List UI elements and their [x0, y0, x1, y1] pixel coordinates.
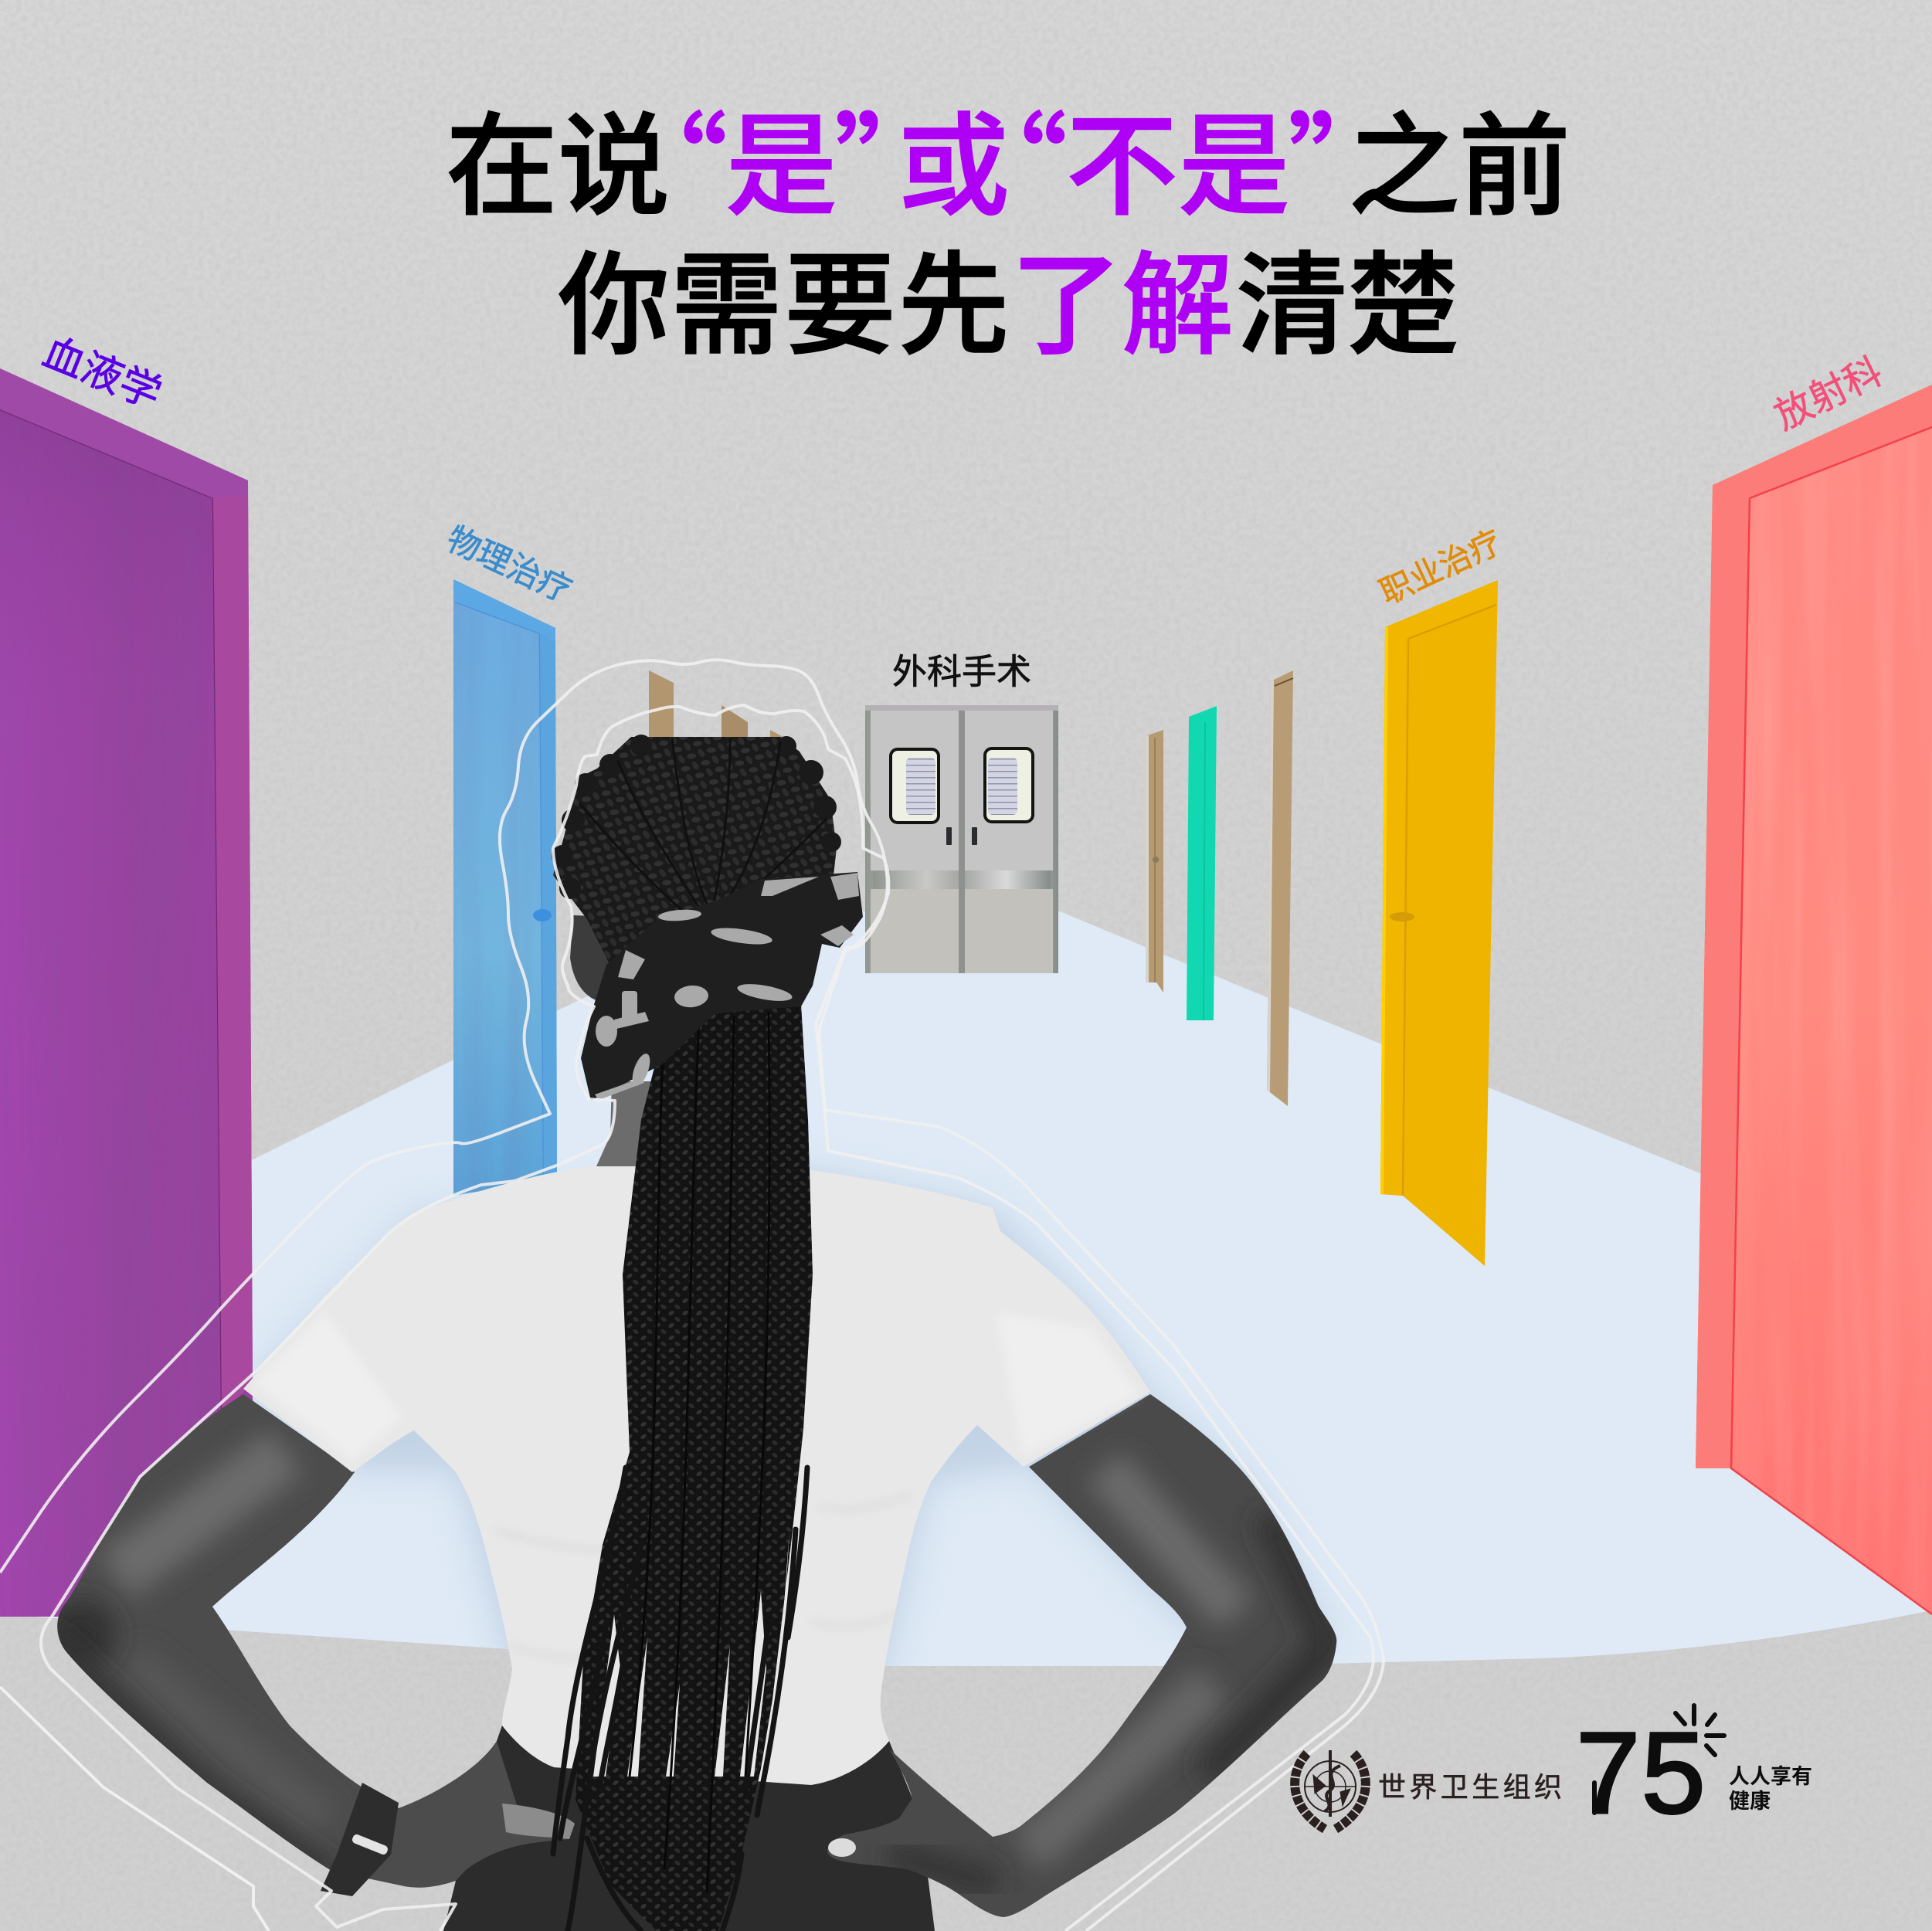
75 anniversary mark: 75 — [1576, 1708, 1706, 1838]
label: occupational therapy: 职业治疗 — [1374, 524, 1507, 611]
scarf — [581, 872, 863, 1101]
label: surgery: 外科手术 — [892, 652, 1031, 691]
title: 要 — [784, 215, 896, 377]
floor — [0, 911, 1932, 1666]
sleeve shading — [255, 1313, 1139, 1658]
door: purple hematology — [0, 363, 255, 1622]
door: back wall small doors — [649, 670, 789, 745]
title — [446, 76, 1570, 377]
title: 清 — [1236, 215, 1348, 377]
title: 是 — [725, 76, 837, 238]
t-shirt — [243, 1162, 1150, 1785]
neck — [596, 1081, 657, 1166]
title: 在 — [446, 76, 558, 238]
left arm — [57, 1394, 569, 1888]
title: “ — [956, 76, 1068, 238]
bottom grey band — [230, 1630, 1621, 1664]
outline: outer echo of body — [0, 660, 1384, 1931]
title: 说 — [558, 76, 670, 238]
title: 楚 — [1347, 215, 1459, 377]
label: hematology: 血液学 — [37, 329, 168, 418]
outline: inner echo of body — [41, 705, 1373, 1931]
ponytail braids — [576, 1004, 813, 1931]
title: ” — [834, 76, 946, 238]
outline: lower left trace — [0, 1687, 269, 1931]
WHO name: 世界卫生组织 — [1378, 1771, 1562, 1803]
door: small brown door — [1146, 730, 1163, 993]
title: 了 — [1010, 215, 1122, 377]
head braids — [553, 737, 837, 1012]
tagline — [1729, 1765, 1812, 1813]
label: physiotherapy: 物理治疗 — [441, 521, 577, 610]
title: 前 — [1458, 76, 1570, 238]
door: surgery double door — [865, 705, 1058, 973]
person shadow on floor — [243, 1169, 1336, 1689]
door: blue physiotherapy — [453, 572, 562, 1205]
window: left — [891, 749, 939, 823]
label: radiology: 放射科 — [1768, 351, 1889, 438]
title: 不 — [1066, 76, 1178, 238]
loose braid strands — [553, 1468, 807, 1931]
title: 解 — [1122, 215, 1234, 377]
door: yellow occupational therapy — [1380, 580, 1498, 1266]
fingernail — [828, 1838, 856, 1857]
icon: WHO emblem — [1295, 1750, 1366, 1829]
door: tan door — [1267, 670, 1293, 1106]
window: right — [985, 748, 1033, 822]
right arm — [827, 1394, 1336, 1917]
head side shadow — [570, 915, 626, 1004]
head braid rows — [579, 738, 827, 915]
title: 是 — [1178, 76, 1290, 238]
title: 你 — [558, 215, 670, 377]
door: red radiology — [1692, 378, 1932, 1622]
left fingers — [502, 1804, 575, 1839]
wristband — [321, 1783, 399, 1896]
title: 先 — [898, 215, 1010, 377]
title: 或 — [898, 76, 1010, 238]
person — [39, 735, 1352, 1931]
head braid bumps — [552, 735, 841, 899]
title: 需 — [671, 215, 783, 377]
jeans — [443, 1726, 935, 1931]
gaps between lower braids — [593, 1529, 789, 1777]
title: “ — [616, 76, 728, 238]
title: 之 — [1348, 76, 1460, 238]
tagline: 人人享有 — [1729, 1765, 1812, 1788]
title: ” — [1288, 76, 1400, 238]
door: teal door — [1187, 706, 1217, 1020]
tagline: 健康 — [1729, 1790, 1771, 1813]
braid division lines — [630, 1012, 769, 1892]
